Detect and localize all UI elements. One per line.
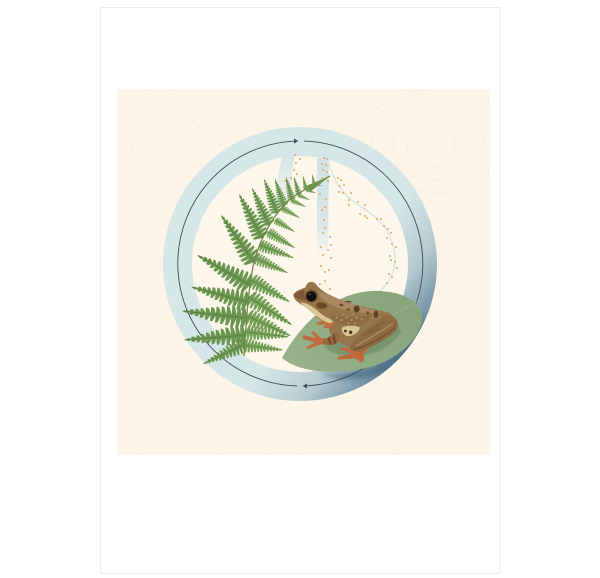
snout shade xyxy=(294,290,306,300)
small front foot xyxy=(315,315,335,328)
back highlight xyxy=(317,290,382,313)
spots xyxy=(354,306,360,312)
flank speckles xyxy=(336,313,363,324)
white card xyxy=(100,8,500,574)
contour lines xyxy=(117,89,490,455)
water streams xyxy=(268,155,395,291)
pale belly xyxy=(342,326,360,336)
back foot xyxy=(337,347,367,363)
ring interior xyxy=(192,156,408,372)
water droplets xyxy=(284,154,398,290)
front arm xyxy=(323,332,339,345)
flank xyxy=(330,313,372,326)
body xyxy=(293,282,393,348)
frog xyxy=(293,282,402,363)
front foot xyxy=(302,331,337,349)
leaf shadow xyxy=(320,318,426,379)
fern tip xyxy=(306,176,330,192)
lily leaf xyxy=(282,291,422,372)
illustration: poster xyxy=(100,7,500,574)
water ring xyxy=(178,142,422,386)
cream panel xyxy=(117,89,490,455)
right pinnae xyxy=(243,183,322,357)
eye xyxy=(305,289,318,303)
left pinnae xyxy=(181,174,316,371)
thigh xyxy=(350,315,398,352)
tympanum xyxy=(316,302,327,309)
rachis xyxy=(244,176,330,356)
frog shadow xyxy=(323,318,402,357)
lip stripe xyxy=(300,302,333,323)
fern xyxy=(181,174,330,371)
cycle arrows xyxy=(178,139,423,388)
